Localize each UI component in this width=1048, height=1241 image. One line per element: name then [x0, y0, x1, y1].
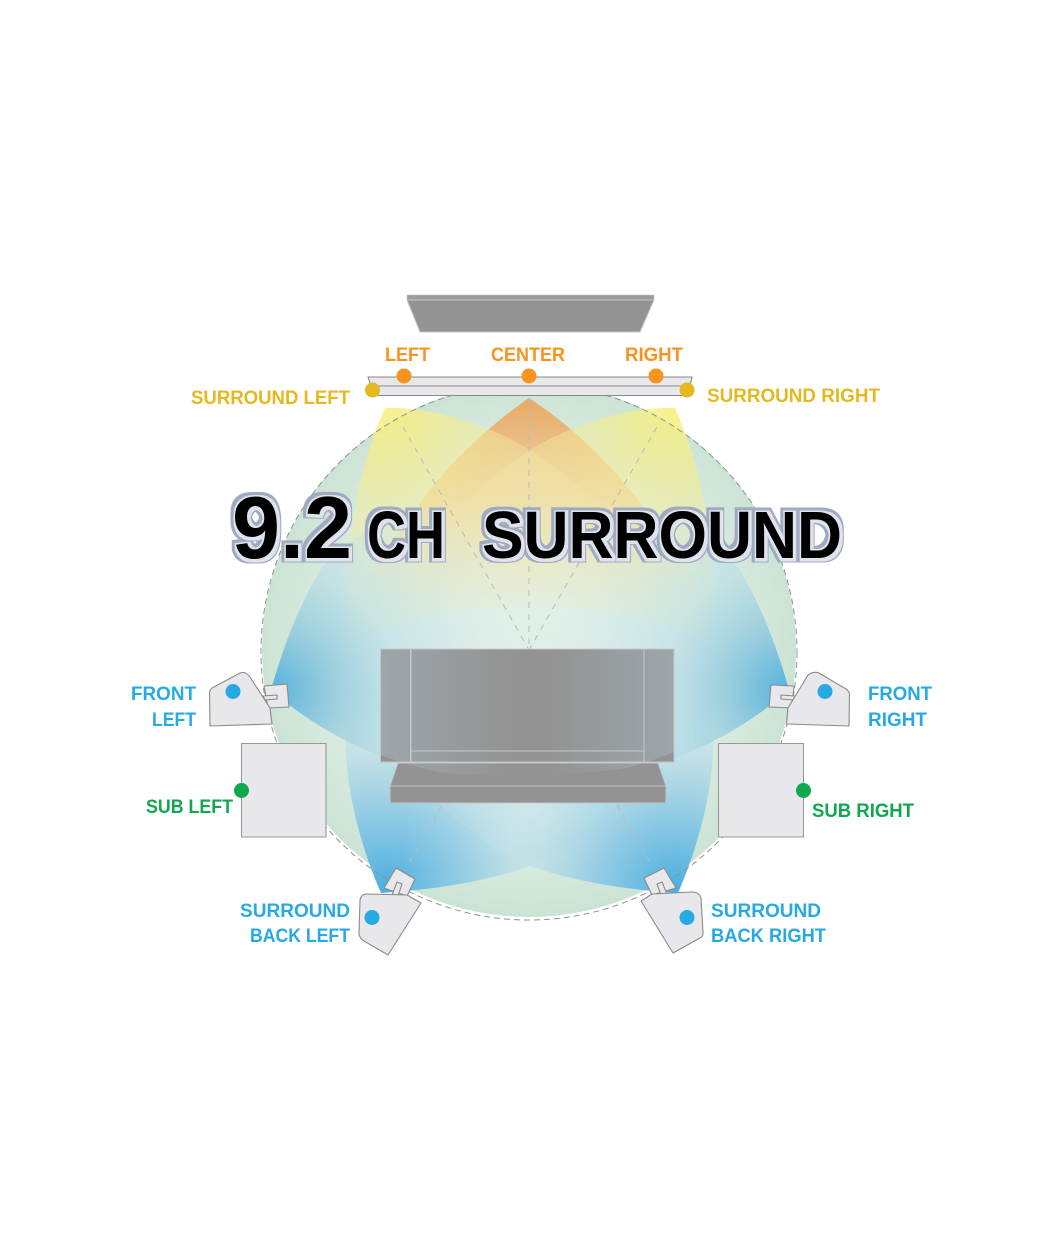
channel dot: sub right — [796, 783, 811, 798]
label: surround back left: SURROUND — [240, 900, 350, 922]
label: front right: RIGHT — [868, 709, 927, 731]
sofa front edge — [390, 786, 666, 803]
sofa seat line — [411, 750, 644, 752]
channel dot: left — [396, 368, 412, 384]
label: surround back left — [240, 900, 350, 947]
channel dot: surround right — [680, 382, 694, 398]
label: surround right: SURROUND RIGHT — [707, 385, 880, 407]
sofa base — [390, 763, 666, 786]
title: SURROUND — [482, 498, 842, 573]
channel dot: surround back right — [680, 910, 694, 925]
subwoofer right — [718, 744, 804, 837]
green listening disc — [262, 383, 796, 917]
channel dot: sub left — [234, 783, 249, 798]
surround back right speaker — [641, 868, 703, 953]
blue front left lobe — [271, 505, 610, 775]
left arm — [380, 649, 410, 762]
channel dot: front left — [226, 684, 240, 699]
front right speaker — [769, 672, 850, 726]
orange front channel lobe — [346, 398, 712, 635]
dashed listening circle — [261, 384, 797, 920]
channel dot: surround back left — [364, 910, 380, 925]
channel dot: right — [648, 368, 664, 384]
blue front right lobe — [450, 505, 789, 775]
label: surround back right — [711, 900, 826, 947]
label: sub left: SUB LEFT — [146, 796, 233, 818]
blue surround back right lobe — [380, 616, 713, 893]
title — [232, 478, 842, 577]
front left speaker — [210, 672, 289, 726]
label: surround back right: BACK RIGHT — [711, 925, 826, 947]
sofa — [380, 649, 674, 803]
surround sound field — [261, 383, 797, 920]
surround back left speaker — [359, 868, 421, 955]
blue surround back left lobe — [346, 616, 680, 893]
label: center: CENTER — [491, 344, 565, 366]
label: front left: LEFT — [152, 709, 196, 731]
yellow surround right lobe — [352, 408, 714, 640]
right arm — [644, 649, 674, 762]
label: front right: FRONT — [868, 683, 932, 705]
label: left: LEFT — [385, 344, 430, 366]
blue tint over sofa — [380, 649, 674, 775]
title: 9.2 — [232, 478, 352, 577]
label: surround left: SURROUND LEFT — [191, 387, 350, 409]
label: front left — [131, 683, 196, 731]
yellow surround left lobe — [346, 408, 708, 640]
subwoofer left — [242, 744, 326, 837]
dashed sound rays — [403, 398, 657, 867]
sofa back — [411, 649, 644, 762]
label: surround back right: SURROUND — [711, 900, 821, 922]
label: right: RIGHT — [625, 344, 683, 366]
title: CH — [367, 498, 445, 573]
label: front left: FRONT — [131, 683, 196, 705]
label: front right — [868, 683, 932, 731]
channel dot: surround left — [365, 382, 380, 398]
screen — [407, 295, 654, 332]
label: sub right: SUB RIGHT — [812, 800, 914, 822]
channel dot: front right — [818, 684, 832, 699]
label: surround back left: BACK LEFT — [250, 925, 350, 947]
soundbar — [368, 377, 692, 396]
channel dot: center — [522, 368, 536, 384]
